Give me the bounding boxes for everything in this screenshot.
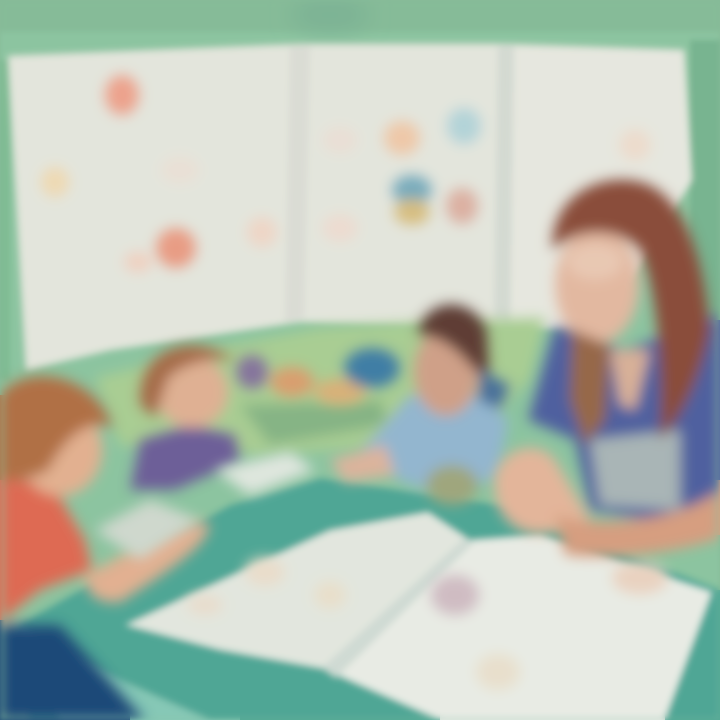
table: [18, 478, 720, 720]
child in purple shirt: [130, 345, 240, 490]
open book on table: [125, 512, 712, 720]
child in red shirt, left foreground: [0, 376, 209, 720]
classroom toys on shelf: [236, 348, 400, 405]
teacher with long brown hair: [494, 179, 720, 557]
book colour spots: [187, 558, 668, 690]
background green shelf: [95, 318, 545, 455]
wall chart poster: [8, 44, 692, 370]
poster colour spots: [41, 75, 651, 272]
child in blue shirt: [330, 304, 510, 505]
paper in front of purple child: [95, 452, 315, 560]
